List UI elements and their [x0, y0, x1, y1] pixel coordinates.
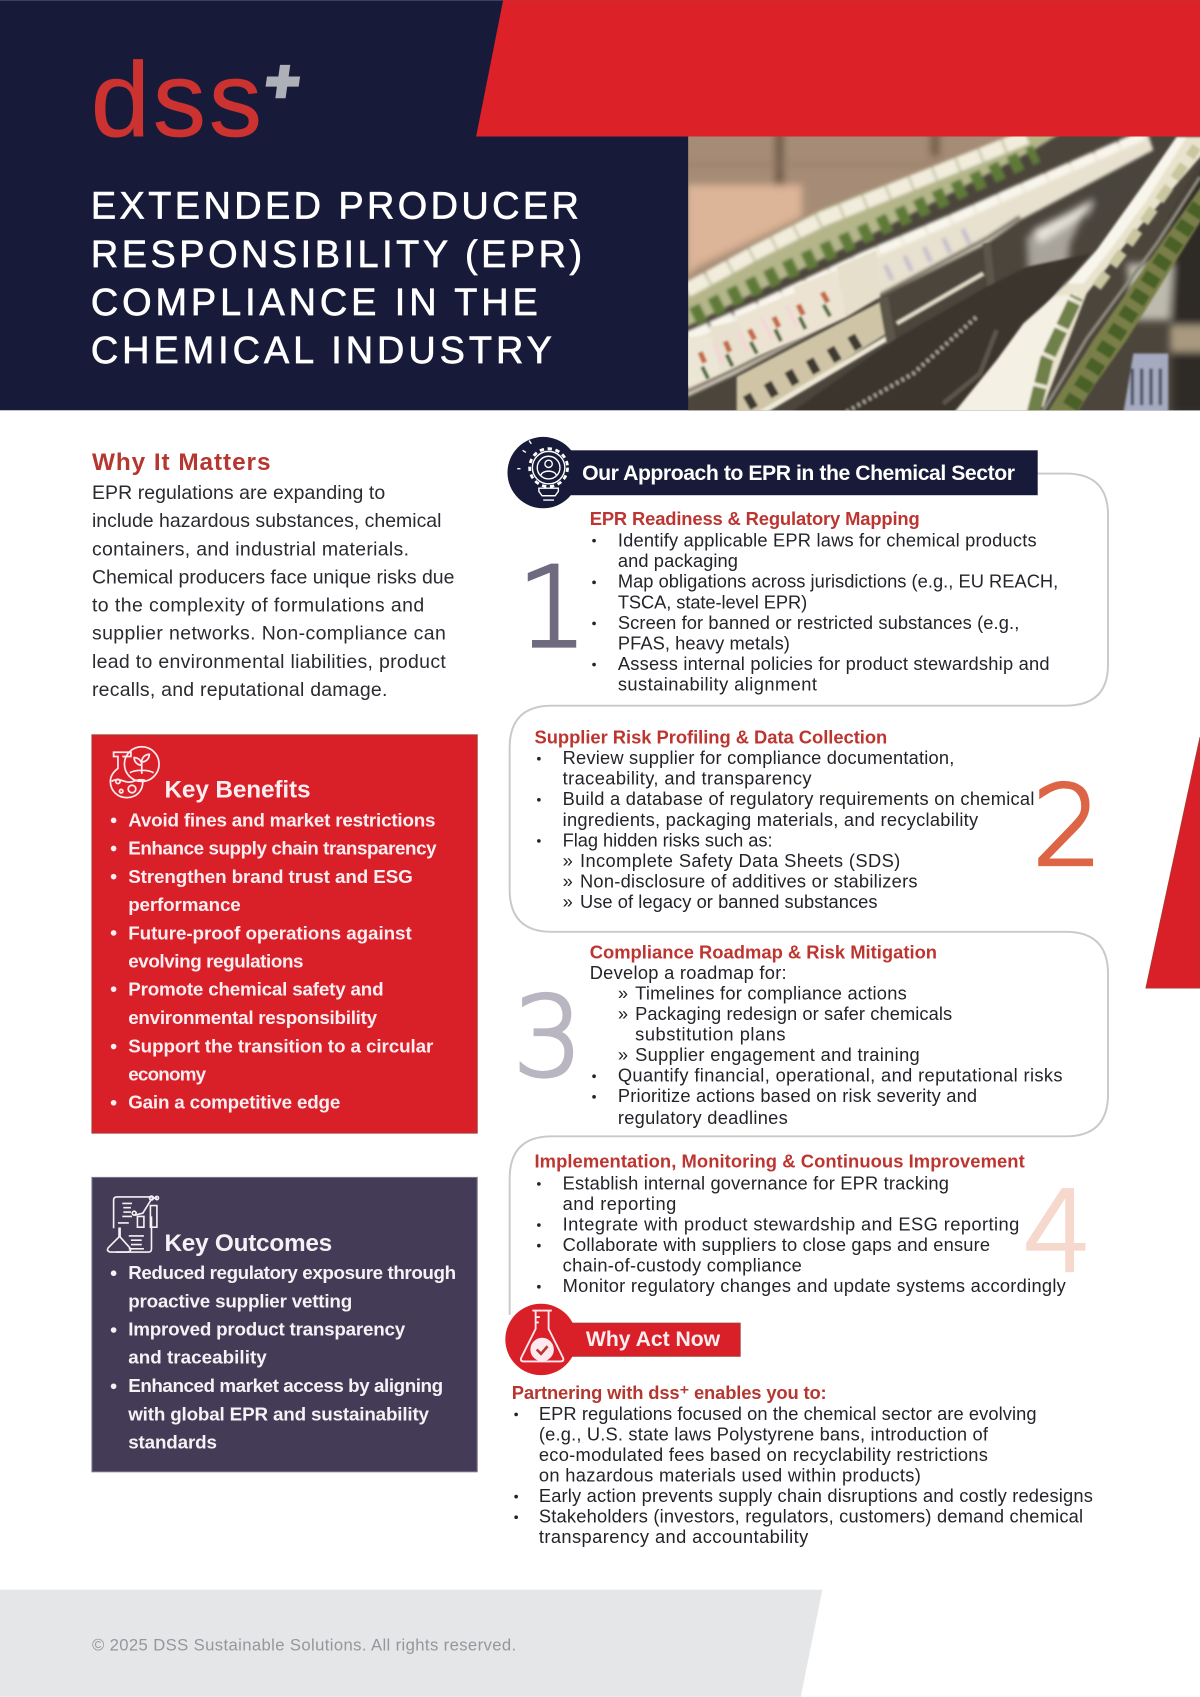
list: step 3: Timelines for compliance actions [635, 982, 907, 1003]
panel: key outcomes [92, 1177, 477, 1472]
list: step 1: Map obligations across jurisdictions (e.g., EU REACH, [618, 571, 1058, 592]
red side shape [1146, 737, 1200, 988]
step 2 [535, 727, 1102, 912]
list: partnering: (e.g., U.S. state laws Polystyrene bans, introduction of [539, 1423, 989, 1444]
far background [680, 127, 1200, 414]
list: step 4: and reporting [563, 1193, 676, 1214]
title [91, 186, 582, 372]
list: step 2 [537, 747, 1034, 912]
list: outcomes: Reduced regulatory exposure through [128, 1262, 456, 1283]
list: outcomes [111, 1262, 456, 1453]
list: partnering: Stakeholders (investors, regulators, customers) demand chemical [539, 1506, 1083, 1527]
list: step 1: Identify applicable EPR laws for chemical products [618, 530, 1037, 551]
list: partnering: eco-modulated fees based on recyclability restrictions [539, 1444, 988, 1465]
list: step 2: Flag hidden risks such as: [563, 829, 773, 850]
list: step 2: ingredients, packaging materials, and recyclability [563, 809, 979, 830]
copyright: © 2025 DSS Sustainable Solutions. All rights reserved. [92, 1635, 516, 1654]
list: step 3: » [618, 982, 628, 1003]
paragraph [92, 482, 454, 701]
list: step 2: traceability, and transparency [563, 768, 812, 789]
list: step 1: sustainability alignment [618, 674, 817, 695]
list: step 2: Review supplier for compliance documentation, [563, 747, 954, 768]
paragraph: recalls, and reputational damage. [92, 679, 387, 701]
list: step 2: Non-disclosure of additives or stabilizers [580, 870, 918, 891]
list: step 3 [590, 962, 1063, 1128]
heading: step 2: Supplier Risk Profiling & Data Collection [535, 727, 887, 748]
title: CHEMICAL INDUSTRY [91, 330, 552, 372]
number 1: 1 [517, 545, 587, 673]
list: outcomes: and traceability [128, 1347, 267, 1368]
list: benefits: Gain a competitive edge [128, 1092, 340, 1113]
banner title: Our Approach to EPR in the Chemical Sector [582, 462, 1015, 485]
list: partnering: transparency and accountability [539, 1526, 809, 1547]
paragraph: EPR regulations are expanding to [92, 482, 385, 504]
list: benefits: environmental responsibility [128, 1007, 378, 1028]
list: benefits: Avoid fines and market restrictions [128, 809, 436, 830]
list: step 4: Collaborate with suppliers to close gaps and ensure [563, 1234, 990, 1255]
list: benefits: Support the transition to a circular [128, 1035, 434, 1056]
list: outcomes: Improved product transparency [128, 1318, 406, 1339]
paragraph: Chemical producers face unique risks due [92, 566, 454, 588]
text block: partnering with dss+ [512, 1382, 1093, 1547]
front carton row [953, 137, 1200, 414]
list: partnering [514, 1403, 1093, 1547]
list: step 4: chain-of-custody compliance [563, 1255, 802, 1276]
list: step 4: Establish internal governance for EPR tracking [563, 1172, 949, 1193]
paragraph: lead to environmental liabilities, product [92, 651, 446, 673]
list: step 3: Prioritize actions based on risk severity and [618, 1085, 977, 1106]
header band [0, 0, 1200, 414]
text block: why it matters [92, 449, 454, 701]
list: outcomes: proactive supplier vetting [128, 1290, 352, 1311]
list: step 2: Build a database of regulatory requirements on chemical [563, 788, 1034, 809]
number 4: 4 [1023, 1170, 1093, 1298]
list: step 1: TSCA, state-level EPR) [618, 591, 807, 612]
icon: flask with check [521, 1311, 563, 1361]
list: benefits: Promote chemical safety and [128, 979, 384, 1000]
list: benefits: evolving regulations [128, 951, 304, 972]
list: step 2: » [563, 870, 573, 891]
title: EXTENDED PRODUCER [91, 186, 579, 228]
banner: why act now [505, 1304, 740, 1375]
paragraph: containers, and industrial materials. [92, 538, 409, 560]
list: outcomes: Enhanced market access by aligning [128, 1375, 443, 1396]
list: step 1: and packaging [618, 550, 738, 571]
number 2: 2 [1032, 764, 1103, 892]
list: step 3: Quantify financial, operational, and reputational risks [618, 1065, 1063, 1086]
list: partnering: EPR regulations focused on the chemical sector are evolving [539, 1403, 1037, 1424]
list: partnering: on hazardous materials used within products) [539, 1465, 921, 1486]
list: benefits: Enhance supply chain transparency [128, 837, 437, 858]
number 3: 3 [513, 975, 583, 1103]
panel: key benefits [92, 735, 477, 1133]
list: step 3: regulatory deadlines [618, 1107, 788, 1128]
icon: bulb with gear and person [517, 441, 568, 500]
list: step 2: Use of legacy or banned substances [580, 891, 878, 912]
list: benefits: performance [128, 894, 241, 915]
list: step 3: » [618, 1003, 628, 1024]
step 1 [517, 508, 1058, 695]
list: step 4 [537, 1172, 1067, 1296]
step 4 [535, 1151, 1093, 1298]
list: step 4: Monitor regulatory changes and update systems accordingly [563, 1275, 1067, 1296]
banner title: Why Act Now [586, 1328, 721, 1351]
list: outcomes: with global EPR and sustainability [127, 1403, 430, 1424]
icon: report with flask [107, 1196, 159, 1252]
list: benefits: Future-proof operations against [128, 922, 412, 943]
paragraph: to the complexity of formulations and [92, 595, 424, 617]
footer [0, 1590, 822, 1697]
list: partnering: Early action prevents supply chain disruptions and costly redesigns [539, 1485, 1093, 1506]
paragraph: include hazardous substances, chemical [92, 510, 441, 532]
middle carton row [687, 130, 1153, 397]
list: step 4: Integrate with product stewardship and ESG reporting [563, 1213, 1019, 1234]
heading: partnering: Partnering with dss⁺ enables you to: [512, 1382, 827, 1403]
photo: carton production line [680, 127, 1200, 414]
list: step 3: » [618, 1044, 628, 1065]
logo: dss+: + [261, 49, 304, 114]
heading: step 1: EPR Readiness & Regulatory Mapping [590, 508, 920, 529]
list: outcomes: standards [128, 1432, 217, 1453]
paragraph: supplier networks. Non-compliance can [92, 623, 446, 645]
list: step 1: Assess internal policies for product stewardship and [618, 653, 1050, 674]
red header shape [476, 0, 1200, 137]
heading: key outcomes: Key Outcomes [164, 1230, 332, 1257]
list: benefits: economy [128, 1063, 207, 1084]
list: step 1 [592, 530, 1058, 695]
list: step 2: Incomplete Safety Data Sheets (SDS) [580, 850, 900, 871]
list: step 1: PFAS, heavy metals) [618, 632, 790, 653]
logo: dss+: dss [91, 41, 262, 159]
icon: flask with plant [110, 747, 159, 798]
title: COMPLIANCE IN THE [91, 282, 538, 324]
list: step 3: substitution plans [635, 1024, 786, 1045]
list: step 2: » [563, 891, 573, 912]
upper carton row [687, 134, 1060, 327]
heading: key benefits: Key Benefits [164, 777, 311, 804]
list: benefits [111, 809, 437, 1113]
list: step 2: » [563, 850, 573, 871]
list: step 3: Develop a roadmap for: [590, 962, 787, 983]
heading: step 4: Implementation, Monitoring & Continuous Improvement [535, 1151, 1025, 1172]
lower level cartons and machinery [687, 244, 1090, 414]
list: benefits: Strengthen brand trust and ESG [128, 866, 413, 887]
banner: our approach [507, 437, 1038, 508]
heading: why it matters: Why It Matters [92, 449, 271, 476]
list: step 1: Screen for banned or restricted substances (e.g., [618, 612, 1019, 633]
list: step 3: Packaging redesign or safer chemicals [635, 1003, 952, 1024]
title: RESPONSIBILITY (EPR) [91, 234, 582, 276]
heading: step 3: Compliance Roadmap & Risk Mitigation [590, 941, 937, 962]
list: step 3: Supplier engagement and training [635, 1044, 920, 1065]
step 3 [513, 941, 1063, 1128]
